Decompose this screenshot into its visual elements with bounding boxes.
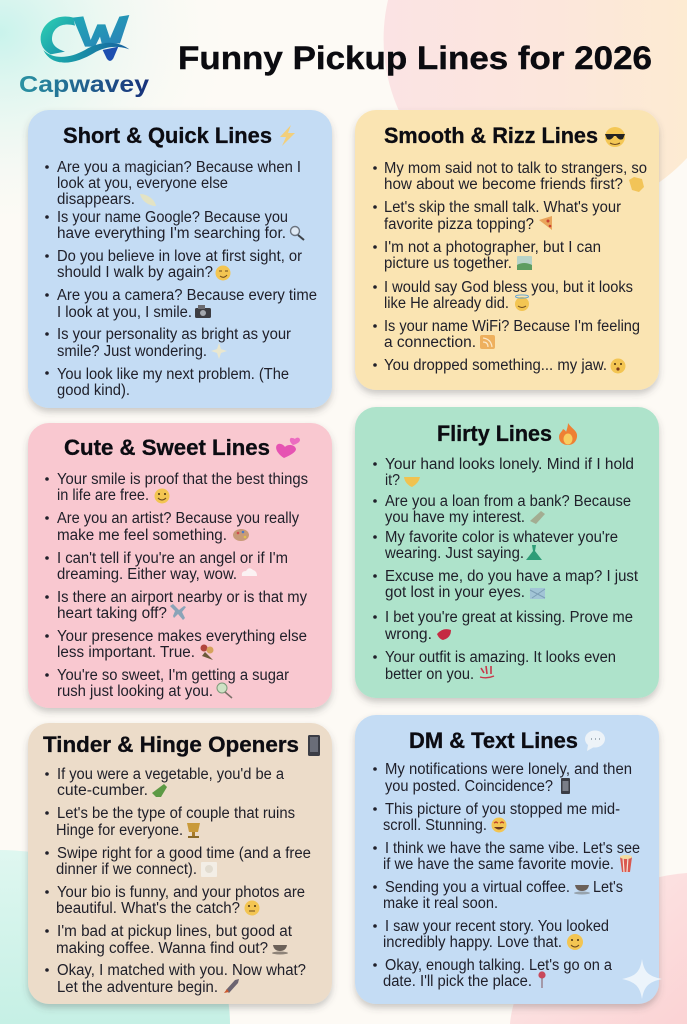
bullet list: smile? Just wondering. — [57, 343, 207, 360]
bullet list — [373, 761, 640, 990]
bullet list: you have my interest. — [385, 509, 525, 526]
bullet list: Sending you a virtual coffee. — [385, 879, 570, 896]
bullet list — [45, 159, 317, 399]
bullet list: Are you a camera? Because every time — [57, 287, 317, 304]
heading: Smooth & Rizz Lines — [384, 123, 598, 148]
background: pink circle — [384, 0, 687, 214]
bullet list: got lost in your eyes. — [385, 584, 525, 601]
icon: palette — [233, 529, 249, 541]
bullet list: you posted. Coincidence? — [385, 778, 553, 795]
bullet list: I look at you, I smile. — [57, 304, 192, 321]
icon: lightning — [280, 125, 295, 146]
bullet list: Swipe right for a good time (and a free — [57, 845, 311, 862]
title: Funny Pickup Lines for 2026 — [178, 40, 652, 76]
bullet list: how about we become friends first? — [384, 176, 623, 193]
bullet list: making coffee. Wanna find out? — [56, 940, 268, 957]
panel: Cute & Sweet Lines — [28, 423, 332, 708]
logo mark: W letter — [73, 15, 129, 47]
panel background — [28, 723, 332, 1004]
bullet list: Let's skip the small talk. What's your — [384, 199, 621, 216]
bullet list: Are you an artist? Because you really — [57, 510, 299, 527]
bullet list: You look like my next problem. (The — [57, 366, 289, 383]
bullet list: dinner if we connect). — [56, 861, 197, 878]
bullet list: date. I'll pick the place. — [383, 973, 532, 990]
icon: cucumber — [152, 784, 167, 797]
bullet list: scroll. Stunning. — [383, 817, 487, 834]
icon: bouquet — [200, 644, 214, 660]
bullet list: Let's — [593, 879, 623, 896]
bullet list: If you were a vegetable, you'd be a — [57, 766, 284, 783]
bullet list — [45, 766, 311, 996]
logo mark: C letter — [41, 17, 75, 54]
icon: rocket — [224, 979, 239, 993]
icon: crescent moon — [140, 194, 156, 206]
bullet list: make it real soon. — [383, 895, 498, 912]
icon: thinking face — [244, 900, 260, 916]
bullet list: Let the adventure begin. — [57, 979, 218, 996]
heading: DM & Text Lines — [409, 728, 578, 753]
bullet list: I think we have the same vibe. Let's see — [385, 840, 640, 857]
bullet list: favorite pizza topping? — [384, 216, 534, 233]
bullet list: I can't tell if you're an angel or if I'm — [57, 550, 288, 567]
bullet list: Do you believe in love at first sight, or — [57, 248, 302, 265]
icon: phone — [561, 778, 570, 794]
bullet list: I bet you're great at kissing. Prove me — [385, 609, 633, 626]
bullet list: Are you a magician? Because when I — [57, 159, 301, 176]
icon: cloud — [242, 568, 257, 576]
icon: pin — [538, 971, 546, 988]
bullet list: You dropped something... my jaw. — [384, 357, 607, 374]
bullet list: Your hand looks lonely. Mind if I hold — [385, 456, 634, 473]
logo wordmark: Capwavey — [19, 71, 149, 97]
icon: sunglasses face — [605, 127, 625, 147]
panel background — [28, 110, 332, 408]
bullet list: My notifications were lonely, and then — [385, 761, 632, 778]
icon: lips — [437, 629, 451, 640]
bullet list: Your presence makes everything else — [57, 628, 307, 645]
bullet list: Your outfit is amazing. It looks even — [385, 649, 616, 666]
bullet list: picture us together. — [384, 255, 512, 272]
bullet list: I'm not a photographer, but I can — [384, 239, 601, 256]
bullet list: My favorite color is whatever you're — [385, 529, 618, 546]
heading: Tinder & Hinge Openers — [43, 732, 299, 757]
icon: waving hand — [629, 177, 644, 192]
bullet list: My mom said not to talk to strangers, so — [384, 160, 647, 177]
icon: trophy — [187, 823, 200, 838]
icon: sparkle star — [622, 959, 662, 999]
bullet list: Your bio is funny, and your photos are — [57, 884, 305, 901]
bullet list: This picture of you stopped me mid- — [385, 801, 620, 818]
bullet list: make me feel something. — [57, 527, 227, 544]
icon: camera — [195, 305, 211, 318]
bullet list: look at you, everyone else — [57, 175, 228, 192]
icon: lollipop — [217, 683, 232, 698]
bullet list: less important. True. — [57, 644, 195, 661]
bullet list: Is there an airport nearby or is that my — [57, 589, 307, 606]
icon: flying money — [530, 511, 545, 524]
bullet list: incredibly happy. Love that. — [383, 934, 562, 951]
icon: coffee — [272, 945, 288, 954]
bullet list: a connection. — [384, 334, 476, 351]
logo mark — [41, 15, 129, 63]
background: bottom-left mint shape — [0, 850, 230, 1024]
logo mark: wave — [43, 43, 129, 63]
icon: dress — [526, 545, 542, 560]
bullet list: better on you. — [385, 666, 474, 683]
icon: star-struck face — [492, 818, 506, 832]
icon: smile face — [154, 488, 170, 504]
bullet list: like He already did. — [384, 295, 509, 312]
bullet list: Is your personality as bright as your — [57, 326, 291, 343]
bullet list: disappears. — [57, 191, 135, 208]
panel background — [355, 715, 659, 1004]
bullet list: Is your name Google? Because you — [57, 209, 288, 226]
bullet list: dreaming. Either way, wow. — [57, 566, 237, 583]
icon: pizza — [539, 216, 552, 230]
panel: DM & Text Lines — [355, 715, 662, 1004]
bullet list: beautiful. What's the catch? — [56, 900, 240, 917]
bullet list: I would say God bless you, but it looks — [384, 279, 633, 296]
logo mark: W tip — [103, 47, 118, 61]
bullet list: Okay, enough talking. Let's go on a — [385, 957, 612, 974]
icon: halo face — [515, 295, 529, 311]
panel: Short & Quick Lines — [28, 110, 332, 408]
heading: Cute & Sweet Lines — [64, 435, 270, 460]
background: bottom-right pink shape — [510, 873, 687, 1024]
bullet list: Okay, I matched with you. Now what? — [57, 962, 306, 979]
bullet list: if we have the same favorite movie. — [383, 856, 614, 873]
bullet list: heart taking off? — [57, 605, 167, 622]
icon: magnifier — [290, 226, 304, 240]
bullet list: Hinge for everyone. — [56, 822, 183, 839]
bullet list: Are you a loan from a bank? Because — [385, 493, 631, 510]
background: top-left mint glow — [0, 0, 240, 220]
bullet list: rush just looking at you. — [57, 683, 213, 700]
icon: phone — [308, 735, 320, 756]
bullet list: good kind). — [57, 382, 130, 399]
icon: sparkles — [211, 343, 227, 359]
bullet list: wearing. Just saying. — [384, 545, 524, 562]
bullet list: it? — [385, 472, 400, 489]
icon: map — [530, 588, 545, 599]
panel: Smooth & Rizz Lines — [355, 110, 659, 390]
logo: Capwavey — [19, 15, 149, 97]
panel: Tinder & Hinge Openers — [28, 723, 332, 1004]
icon: signal square — [480, 335, 495, 349]
panel background — [355, 407, 659, 698]
icon: coffee — [574, 885, 590, 894]
panel: Flirty Lines — [355, 407, 659, 698]
icon: surprised face — [610, 358, 626, 374]
panel background — [355, 110, 659, 390]
bullet list: should I walk by again? — [57, 264, 213, 281]
bullet list: wrong. — [384, 626, 432, 643]
bullet list: I saw your recent story. You looked — [385, 918, 609, 935]
heading: Short & Quick Lines — [63, 123, 272, 148]
panel background — [28, 423, 332, 708]
icon: two hearts — [276, 438, 300, 458]
bullet list: cute-cumber. — [57, 782, 148, 799]
bullet list: in life are free. — [57, 487, 149, 504]
bullet list: have everything I'm searching for. — [57, 225, 286, 242]
icon: airplane — [170, 604, 186, 620]
bullet list: Is your name WiFi? Because I'm feeling — [384, 318, 640, 335]
icon: speech bubble — [585, 730, 605, 751]
bullet list — [373, 160, 647, 374]
bullet list: You're so sweet, I'm getting a sugar — [57, 667, 289, 684]
icon: plate — [201, 862, 217, 877]
bullet list — [45, 471, 308, 700]
bullet list — [373, 456, 639, 683]
bullet list: Your smile is proof that the best things — [57, 471, 308, 488]
heading: Flirty Lines — [437, 421, 552, 446]
icon: 100 mark — [480, 666, 494, 678]
icon: picture — [517, 256, 532, 270]
bullet list: Let's be the type of couple that ruins — [57, 805, 295, 822]
bullet list: I'm bad at pickup lines, but good at — [57, 923, 293, 940]
icon: smirk face — [216, 266, 230, 280]
icon: holding hands — [404, 477, 420, 487]
icon: popcorn — [620, 855, 632, 872]
icon: fire — [559, 423, 577, 445]
bullet list: Excuse me, do you have a map? I just — [385, 568, 639, 585]
icon: smile face — [567, 934, 583, 950]
